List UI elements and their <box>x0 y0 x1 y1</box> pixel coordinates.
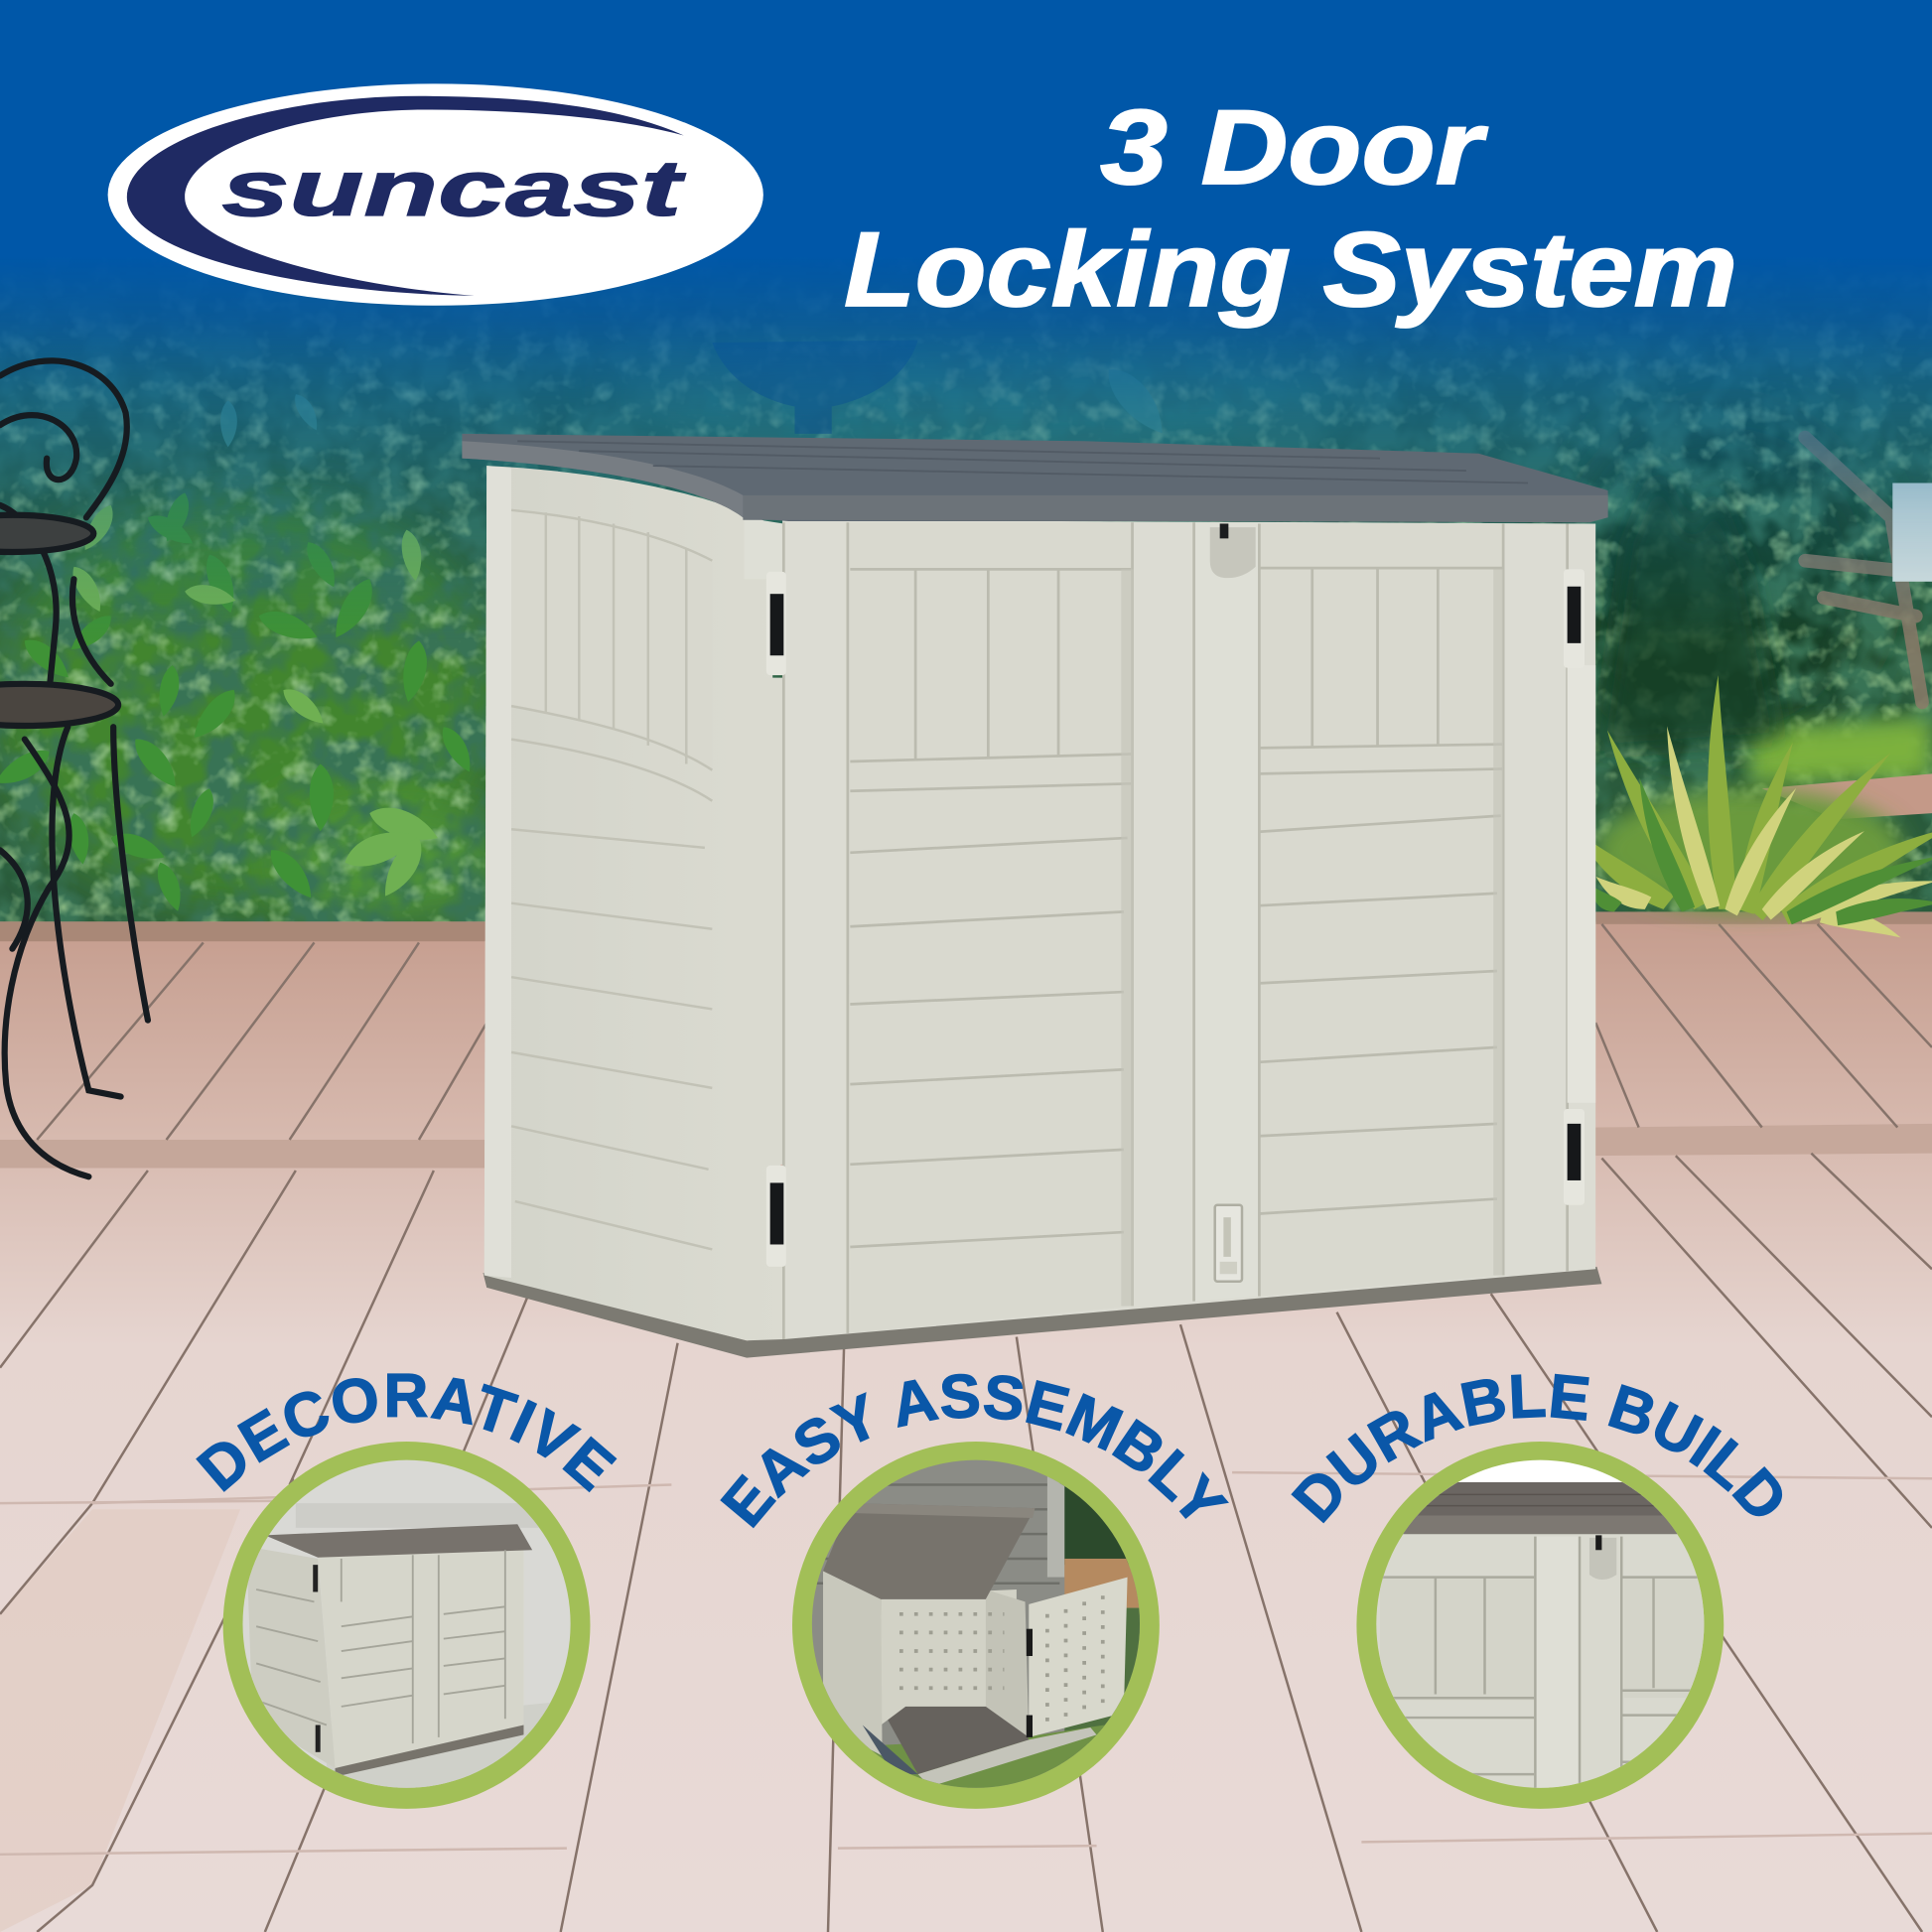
left door panel <box>848 522 1134 1333</box>
hinges <box>766 569 1585 1267</box>
title: 3 Door <box>1100 87 1488 207</box>
logo: Suncast <box>108 83 763 306</box>
garden background <box>0 246 1932 936</box>
feature: decorative <box>196 1373 618 1809</box>
curved label durable build: DURABLE BUILD <box>1291 1374 1783 1523</box>
bird bath silhouette <box>712 341 918 434</box>
curved label decorative: DECORATIVE <box>196 1373 618 1493</box>
shed <box>462 434 1608 1358</box>
pink path behind plants <box>1762 773 1932 819</box>
plant right <box>1567 675 1932 945</box>
shed front <box>782 520 1595 1339</box>
wrought iron chairs <box>0 360 148 1176</box>
right door panel <box>1259 523 1503 1297</box>
padlock hasp <box>1210 523 1256 578</box>
feature: durable build <box>1291 1374 1783 1809</box>
shed base <box>483 1267 1601 1358</box>
header background <box>0 0 1932 369</box>
white structure right <box>1892 483 1932 582</box>
blue fade <box>0 0 1932 640</box>
logo: Suncast: suncast <box>221 144 687 232</box>
leaves left <box>0 490 479 914</box>
door handle <box>1215 1205 1242 1282</box>
logs right <box>1805 438 1922 702</box>
deck <box>0 911 1932 1932</box>
title <box>844 87 1737 329</box>
green ring easy assembly <box>792 1442 1160 1809</box>
green ring decorative <box>223 1442 590 1809</box>
feature: easy assembly <box>720 1374 1229 1809</box>
green ring durable build <box>1356 1442 1724 1809</box>
roof <box>462 434 1608 522</box>
lawn <box>1749 717 1932 783</box>
centre pillars <box>1134 522 1192 1307</box>
photo easy assembly <box>812 1459 1140 1788</box>
curved label easy assembly: EASY ASSEMBLY <box>720 1374 1229 1529</box>
conifers right <box>1596 469 1780 752</box>
title: Locking System <box>844 209 1737 329</box>
photo decorative <box>234 1453 579 1799</box>
photo durable build <box>1376 1459 1704 1788</box>
shed side wall <box>484 466 783 1340</box>
